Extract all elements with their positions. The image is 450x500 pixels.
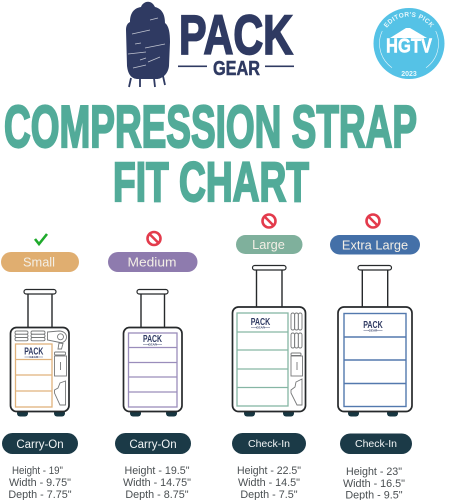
badge: HGTV editor's pick 2023: HGTV — [386, 36, 433, 58]
pill: Medium: Medium — [128, 254, 176, 270]
dimensions: Large — [237, 465, 301, 500]
category: Check-In — [232, 433, 306, 454]
category: Check-In: Check-In — [355, 438, 397, 450]
pill: Small: Small — [23, 254, 55, 270]
mini logo: GEAR — [256, 326, 266, 330]
icon: prohibited — [262, 214, 276, 228]
mini logo: PACK — [143, 333, 162, 345]
strap panel: orange — [16, 344, 52, 407]
mini logo — [143, 333, 162, 346]
strap panel: purple — [128, 333, 177, 407]
category: Check-In — [340, 434, 412, 454]
mini logo: GEAR — [148, 342, 158, 346]
dimensions: Extra Large — [343, 466, 405, 500]
suitcase: Medium — [124, 290, 182, 416]
dimensions: Small — [8, 465, 72, 500]
column: Small — [1, 234, 79, 500]
icon: rolled clothes — [291, 313, 302, 348]
pill: Extra Large: Extra Large — [342, 237, 408, 252]
mini logo: GEAR — [29, 355, 39, 359]
dimensions: Medium: Width - 14.75" — [123, 477, 191, 489]
column: Extra Large — [330, 214, 420, 500]
title — [4, 94, 417, 213]
mini logo: PACK — [363, 319, 383, 331]
icon: green check — [35, 234, 47, 244]
mini logo — [251, 316, 271, 330]
category: Carry-On: Carry-On — [129, 439, 177, 451]
logo wordmark: GEAR: GEAR — [213, 57, 260, 80]
column: Medium — [108, 232, 198, 500]
pill: Medium — [108, 252, 198, 272]
pill: Small — [1, 252, 79, 272]
mini logo: GEAR — [369, 328, 378, 332]
dimensions: Large: Width - 14.5" — [238, 477, 300, 489]
category: Carry-On: Carry-On — [16, 439, 64, 451]
dimensions: Extra Large: Height - 23" — [346, 466, 402, 478]
pill: Large: Large — [252, 237, 285, 252]
mini logo — [24, 346, 44, 359]
pill: Large — [236, 235, 302, 254]
mini logo: PACK — [24, 346, 44, 358]
logo: Pack Gear — [126, 2, 294, 87]
suitcase: Large — [232, 266, 306, 416]
icon: hair dryer — [48, 331, 66, 349]
icon: folded trousers — [54, 352, 66, 376]
icon: prohibited — [148, 232, 160, 245]
badge: HGTV editor's pick 2023: EDITOR'S PICK — [384, 12, 434, 28]
dimensions: Medium — [123, 465, 191, 500]
dimensions: Small: Width - 9.75" — [9, 477, 71, 489]
dimensions: Small: Height - 19" — [12, 465, 63, 477]
icon: folded trousers — [291, 353, 302, 376]
icon: backpack — [126, 2, 170, 87]
category: Carry-On — [115, 433, 191, 454]
column: Large — [232, 214, 306, 500]
strap panel: blue — [344, 314, 406, 406]
suitcase: Small — [10, 290, 69, 416]
strap panel: green — [237, 313, 288, 406]
dimensions: Large: Height - 22.5" — [237, 465, 301, 477]
pill: Extra Large — [330, 235, 420, 254]
dimensions: Medium: Height - 19.5" — [124, 465, 190, 477]
badge: HGTV editor's pick 2023: 2023 — [401, 71, 417, 78]
icon: shoe — [291, 379, 302, 405]
icon: shoe — [54, 381, 66, 405]
mini logo — [363, 319, 383, 332]
mini logo: PACK — [251, 316, 271, 328]
dimensions: Extra Large: Width - 16.5" — [343, 478, 405, 490]
icon: folded clothes — [15, 331, 45, 341]
logo wordmark: PACK: PACK — [179, 3, 293, 66]
category: Check-In: Check-In — [248, 438, 290, 450]
title: FIT CHART — [113, 150, 309, 213]
suitcase: Extra Large — [338, 266, 412, 416]
icon: prohibited — [366, 214, 380, 228]
category: Carry-On — [2, 433, 78, 454]
badge: HGTV editor's pick 2023 — [374, 8, 444, 79]
